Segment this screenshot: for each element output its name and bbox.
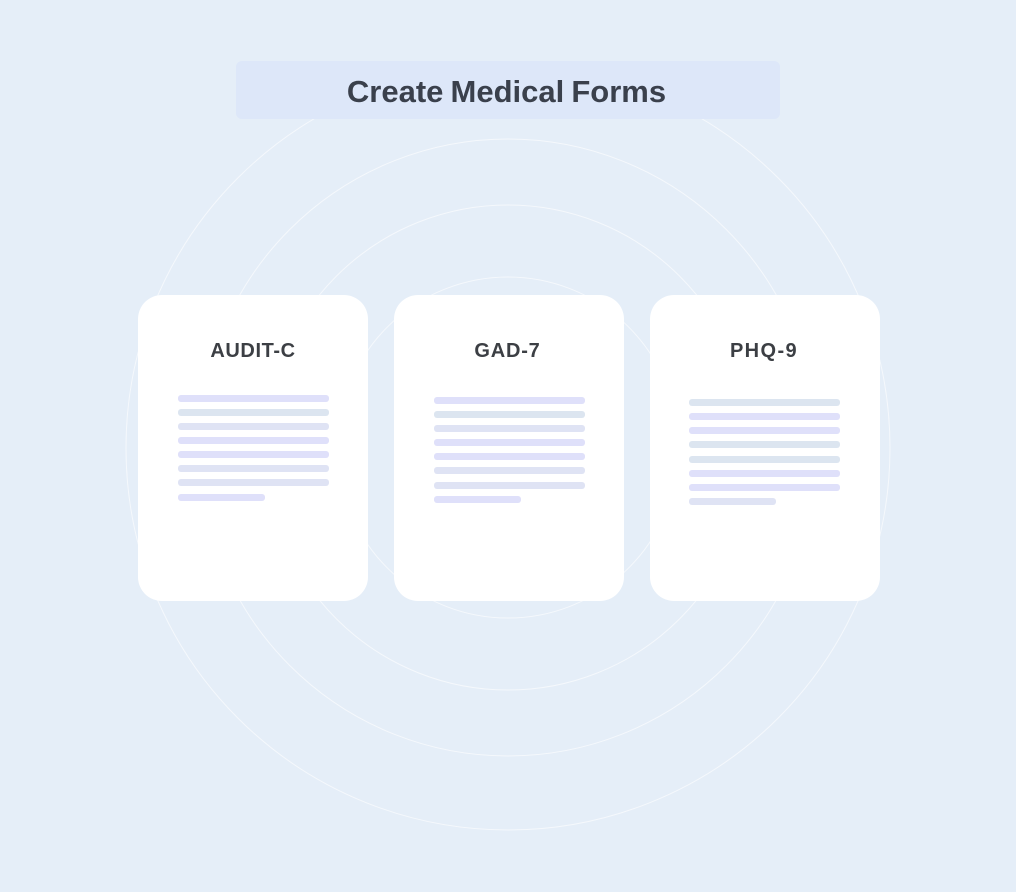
panel: PHQ-9 form: [650, 295, 880, 601]
heading: GAD-7: GAD-7: [474, 340, 541, 362]
heading: AUDIT-C: AUDIT-C: [210, 340, 296, 362]
panel: GAD-7 form: [394, 295, 624, 601]
placeholder text lines: [434, 397, 585, 503]
title banner: Create Medical Forms: [347, 74, 666, 109]
panel: AUDIT-C form: [138, 295, 368, 601]
heading: PHQ-9: PHQ-9: [730, 340, 798, 362]
placeholder text lines: [178, 395, 329, 501]
title banner: [236, 61, 780, 119]
placeholder text lines: [689, 399, 840, 505]
